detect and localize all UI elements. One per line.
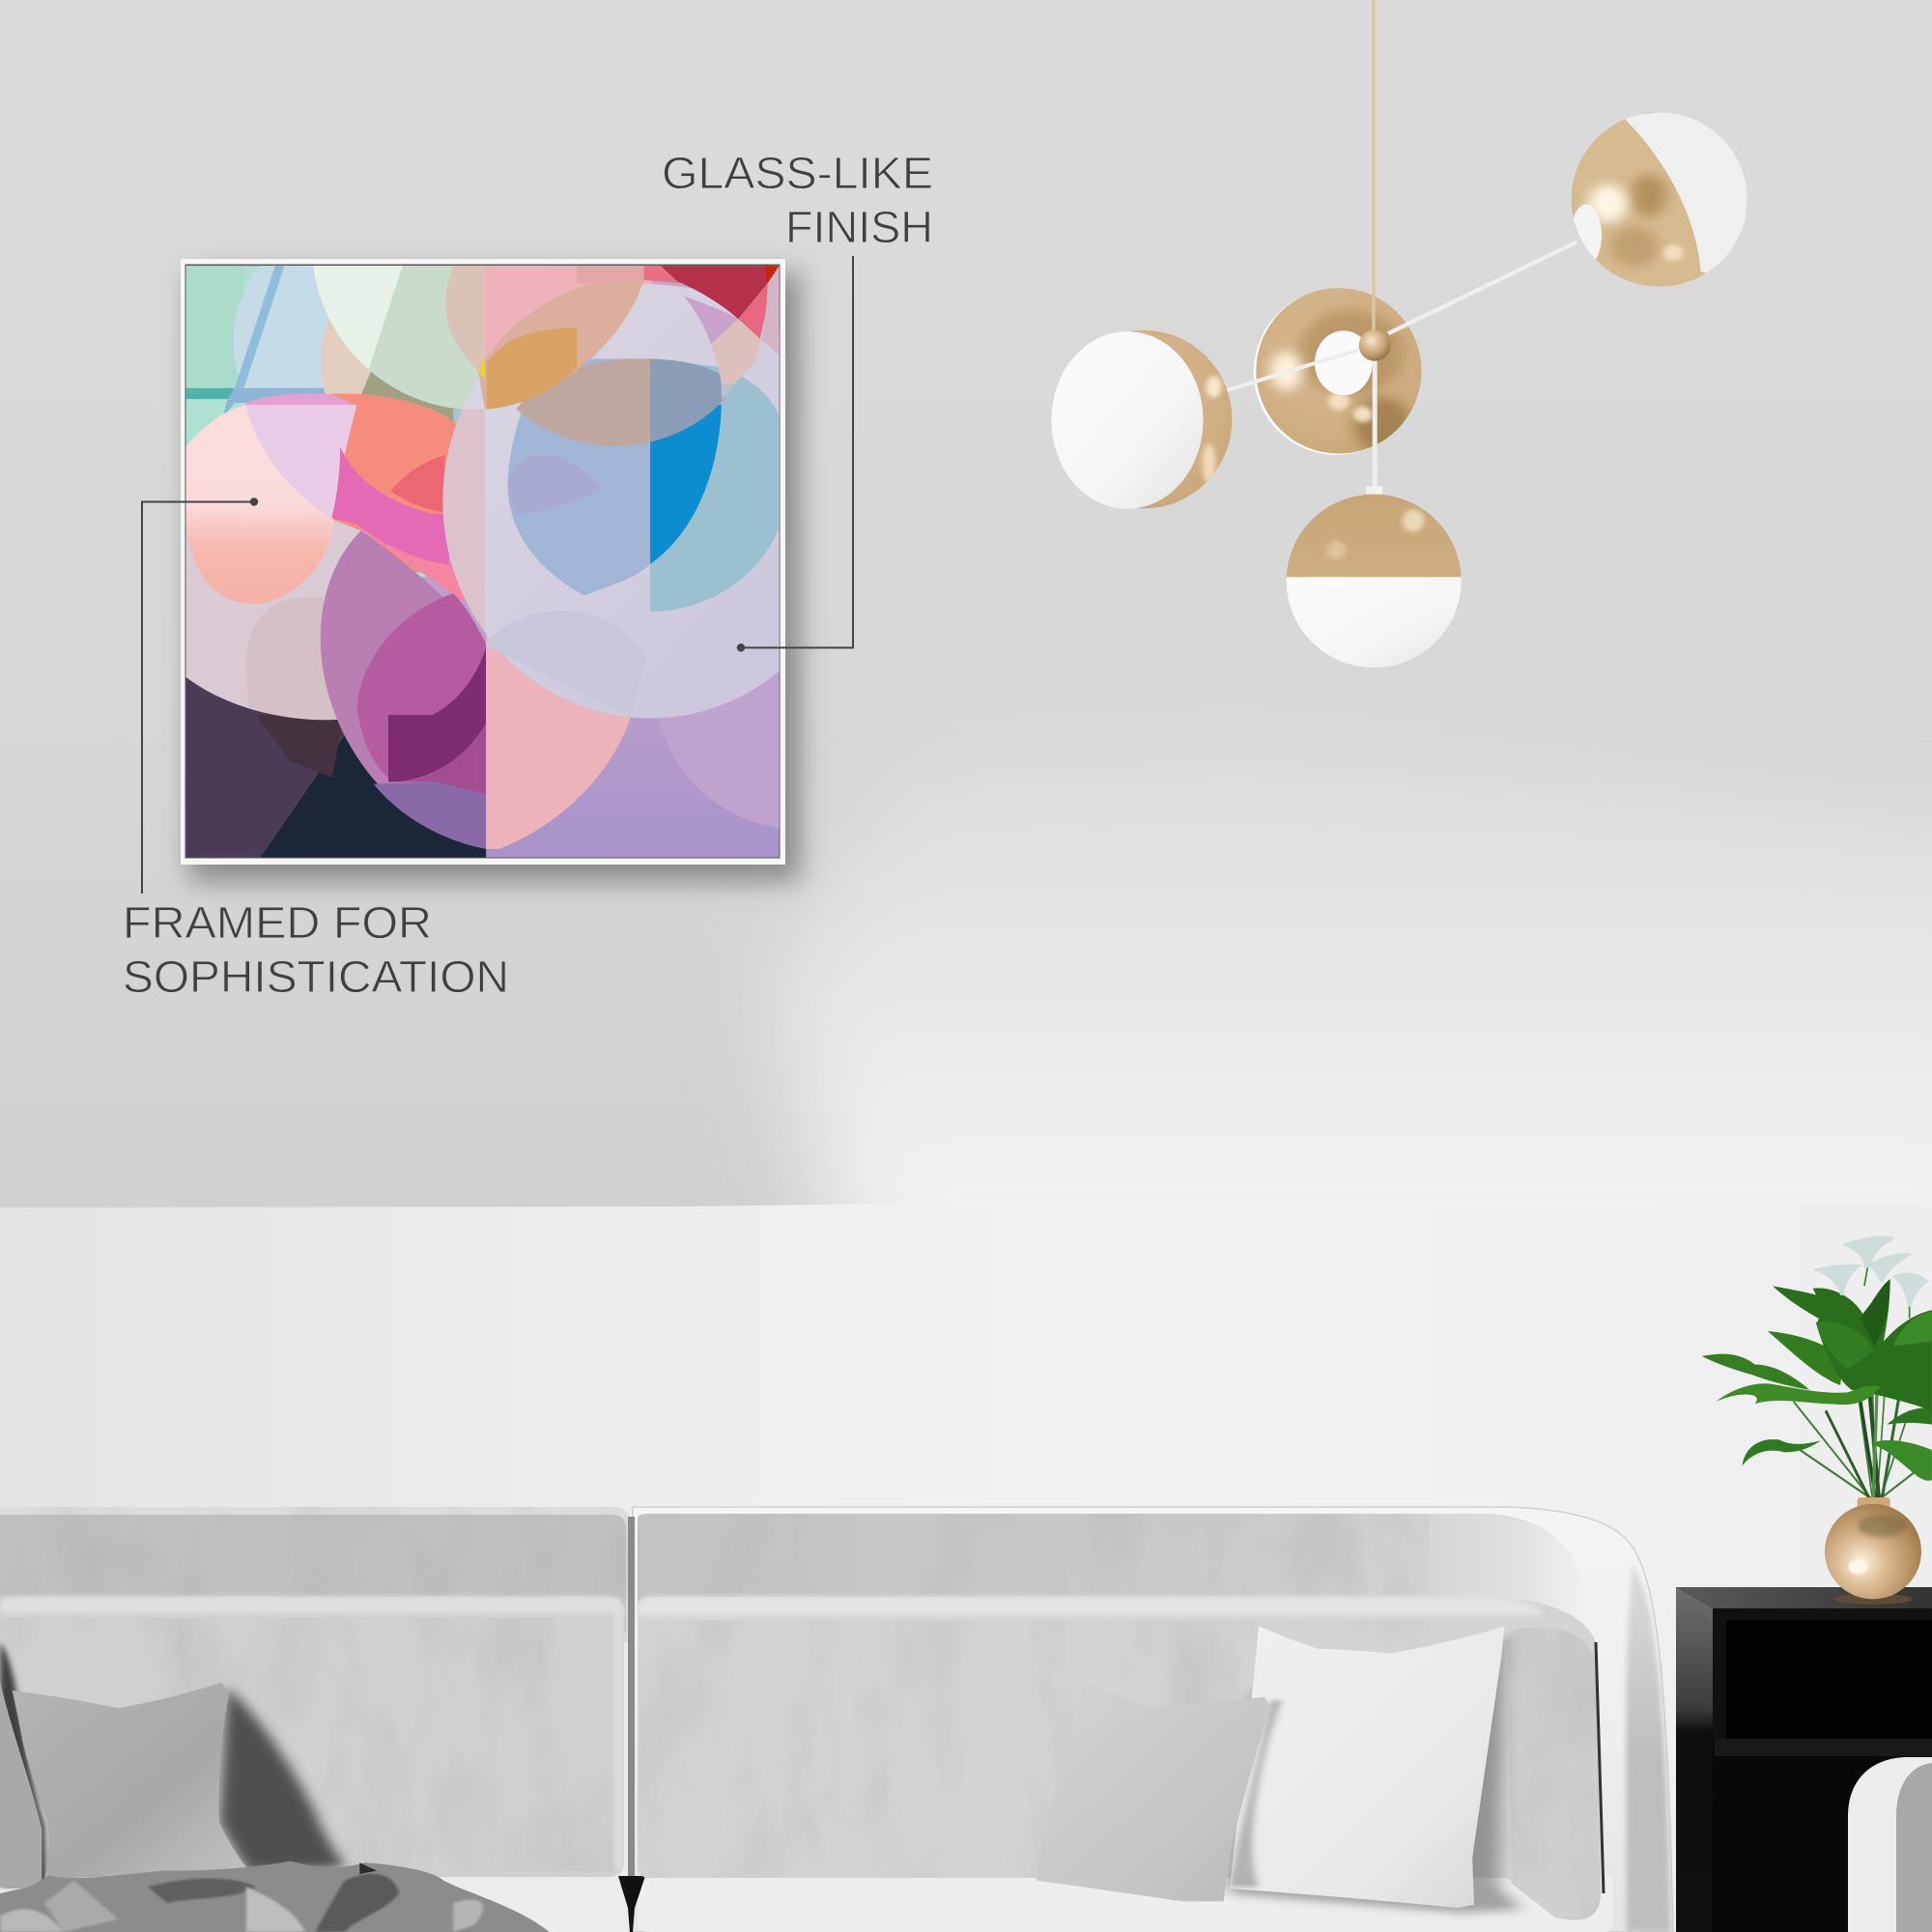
callout: framed for sophistication bbox=[123, 897, 509, 1002]
console table bbox=[1676, 1587, 1932, 1932]
wall: lower light panel bbox=[0, 1202, 1932, 1932]
plant: leaves bbox=[1702, 1279, 1932, 1481]
sofa: seat cushions bbox=[0, 1874, 1613, 1932]
left pillow bbox=[13, 1683, 249, 1879]
wall: upper grey bbox=[0, 0, 1932, 1294]
lamp: hub bbox=[1359, 329, 1391, 361]
leader line: framed for sophistication bbox=[142, 497, 258, 894]
lamp: center shade bbox=[1254, 288, 1421, 455]
framed painting bbox=[173, 256, 816, 897]
sofa: left back bbox=[0, 1507, 638, 1877]
sofa: arm side band bbox=[1626, 1565, 1670, 1932]
throw blanket bbox=[0, 1861, 550, 1932]
lamp: arms bbox=[1226, 242, 1577, 489]
callout: framed for sophistication: FRAMED FOR bbox=[123, 897, 432, 948]
leader line: glass-like finish bbox=[737, 256, 853, 652]
left edge pillow bbox=[0, 1642, 46, 1887]
lamp: cord bbox=[1372, 0, 1376, 337]
right pillows bbox=[1037, 1626, 1522, 1913]
pendant lamp bbox=[1051, 0, 1754, 671]
small pillow bbox=[1037, 1683, 1270, 1901]
sofa: right back bbox=[638, 1514, 1604, 1922]
lamp: right shade bbox=[1571, 112, 1747, 287]
plant: white flowers bbox=[1813, 1236, 1929, 1307]
left pillow shadow bbox=[219, 1688, 345, 1871]
gold vase bbox=[1825, 1497, 1921, 1605]
lamp: bottom shade bbox=[1284, 487, 1466, 671]
armchair bbox=[1848, 1757, 1932, 1932]
sofa seam bbox=[628, 1517, 635, 1876]
sofa: outer shell bbox=[633, 1507, 1673, 1932]
callout: framed for sophistication: SOPHISTICATION bbox=[123, 952, 509, 1002]
callout: glass-like finish: GLASS-LIKE bbox=[662, 148, 933, 198]
plant: stems bbox=[1794, 1267, 1922, 1498]
big pillow bbox=[1230, 1626, 1505, 1908]
lamp: left shade bbox=[1051, 330, 1232, 509]
abstract artwork canvas bbox=[185, 266, 780, 858]
plant with flowers bbox=[1702, 1236, 1932, 1498]
callout: glass-like finish: FINISH bbox=[785, 202, 933, 252]
callout: glass-like finish bbox=[662, 148, 933, 252]
